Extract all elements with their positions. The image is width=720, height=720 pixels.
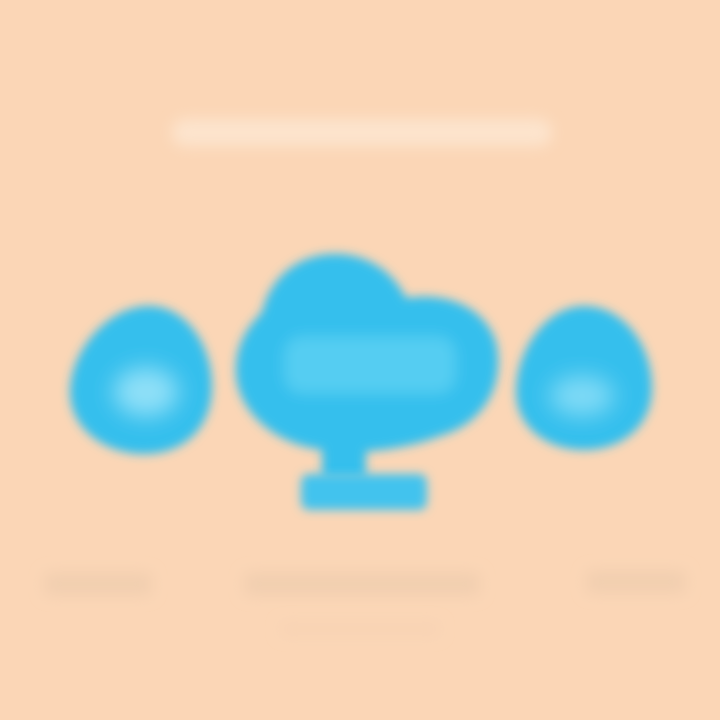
lower caption <box>280 622 440 636</box>
centre caption <box>244 572 480 596</box>
right drop highlight <box>550 376 614 416</box>
left caption <box>44 572 152 596</box>
monitor base <box>301 474 427 510</box>
right caption <box>586 570 686 594</box>
left drop highlight <box>114 368 178 416</box>
icon: left drop <box>70 306 212 454</box>
cloud stem <box>322 444 366 478</box>
icon: right drop <box>516 306 652 450</box>
cloud inner panel <box>284 336 456 394</box>
icon: central cloud <box>236 254 498 478</box>
title bar <box>172 119 552 146</box>
